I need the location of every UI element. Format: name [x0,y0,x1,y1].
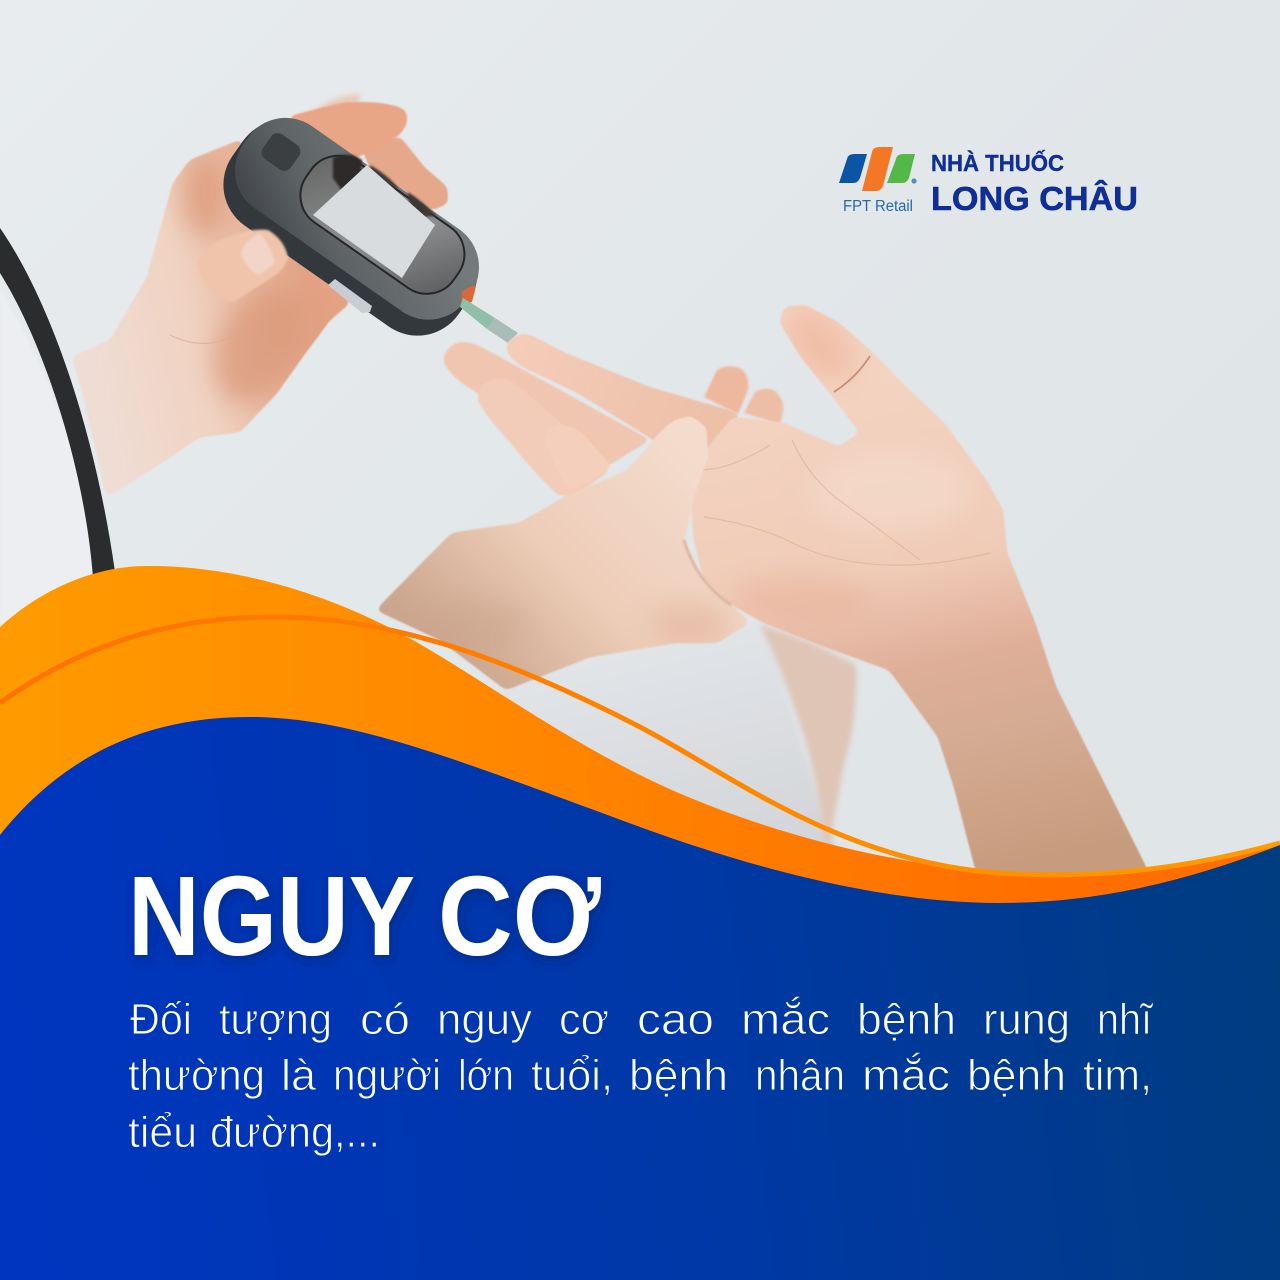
body text: cao [637,995,714,1044]
logo: FPT Retail Nhà Thuốc Long Châu [839,147,1138,217]
meter side port [328,279,372,313]
body text: tuổi, [531,1051,613,1100]
stethoscope tube [0,228,115,578]
body text: đường,... [210,1108,380,1157]
body text: có [360,995,410,1044]
blue panel [0,717,1280,1280]
doctor hand holding meter [72,95,448,497]
icon: FPT tri-colour mark [839,147,917,191]
thumb [197,230,288,302]
thumb nail [241,233,275,275]
patient open palm and forearm [690,297,1150,875]
index finger [506,334,738,460]
body text: bệnh [629,1051,728,1100]
body text: tượng [219,995,332,1044]
body text: tiểu [128,1108,197,1157]
top finger [287,102,407,160]
patient other arm, blurred [760,625,856,845]
title [128,853,602,979]
body text: là [281,1051,317,1100]
second finger [443,342,650,470]
title: NGUY [128,853,415,979]
body text: nguy [437,995,532,1044]
body text: Đối [130,995,192,1044]
body text: tim, [1083,1051,1152,1100]
body text: nhĩ [1097,995,1154,1044]
short finger [544,425,612,490]
orange wave band [0,566,1280,930]
body text: thường [128,1051,265,1100]
test strip [460,298,518,343]
title: CƠ [438,853,602,979]
palm creases [834,356,870,392]
third finger [477,378,610,498]
meter screen [287,143,477,307]
patient white clothing [500,622,835,880]
thin orange swoosh line [0,617,1280,875]
glucose meter [204,100,498,355]
body text: cơ [559,995,609,1044]
body text: bệnh [967,1051,1066,1100]
meter button [258,130,304,174]
photo: doctor and patient scene [0,95,1150,880]
FPT Retail text: FPT Retail [843,198,913,215]
Nhà Thuốc text: NHÀ THUỐC [931,149,1064,176]
body text: lớn [458,1051,514,1100]
doctor coat [0,290,95,625]
patient lower hand with thumb [376,416,750,690]
body text: người [333,1051,441,1100]
body text: mắc [862,1051,950,1100]
body text: bệnh [857,995,956,1044]
body text: rung [983,995,1070,1044]
body text: mắc [741,995,830,1044]
body text: nhân [755,1051,845,1100]
back fingers of patient [704,366,783,424]
body text [128,995,1154,1157]
Long Châu text: LONG CHÂU [931,180,1138,217]
